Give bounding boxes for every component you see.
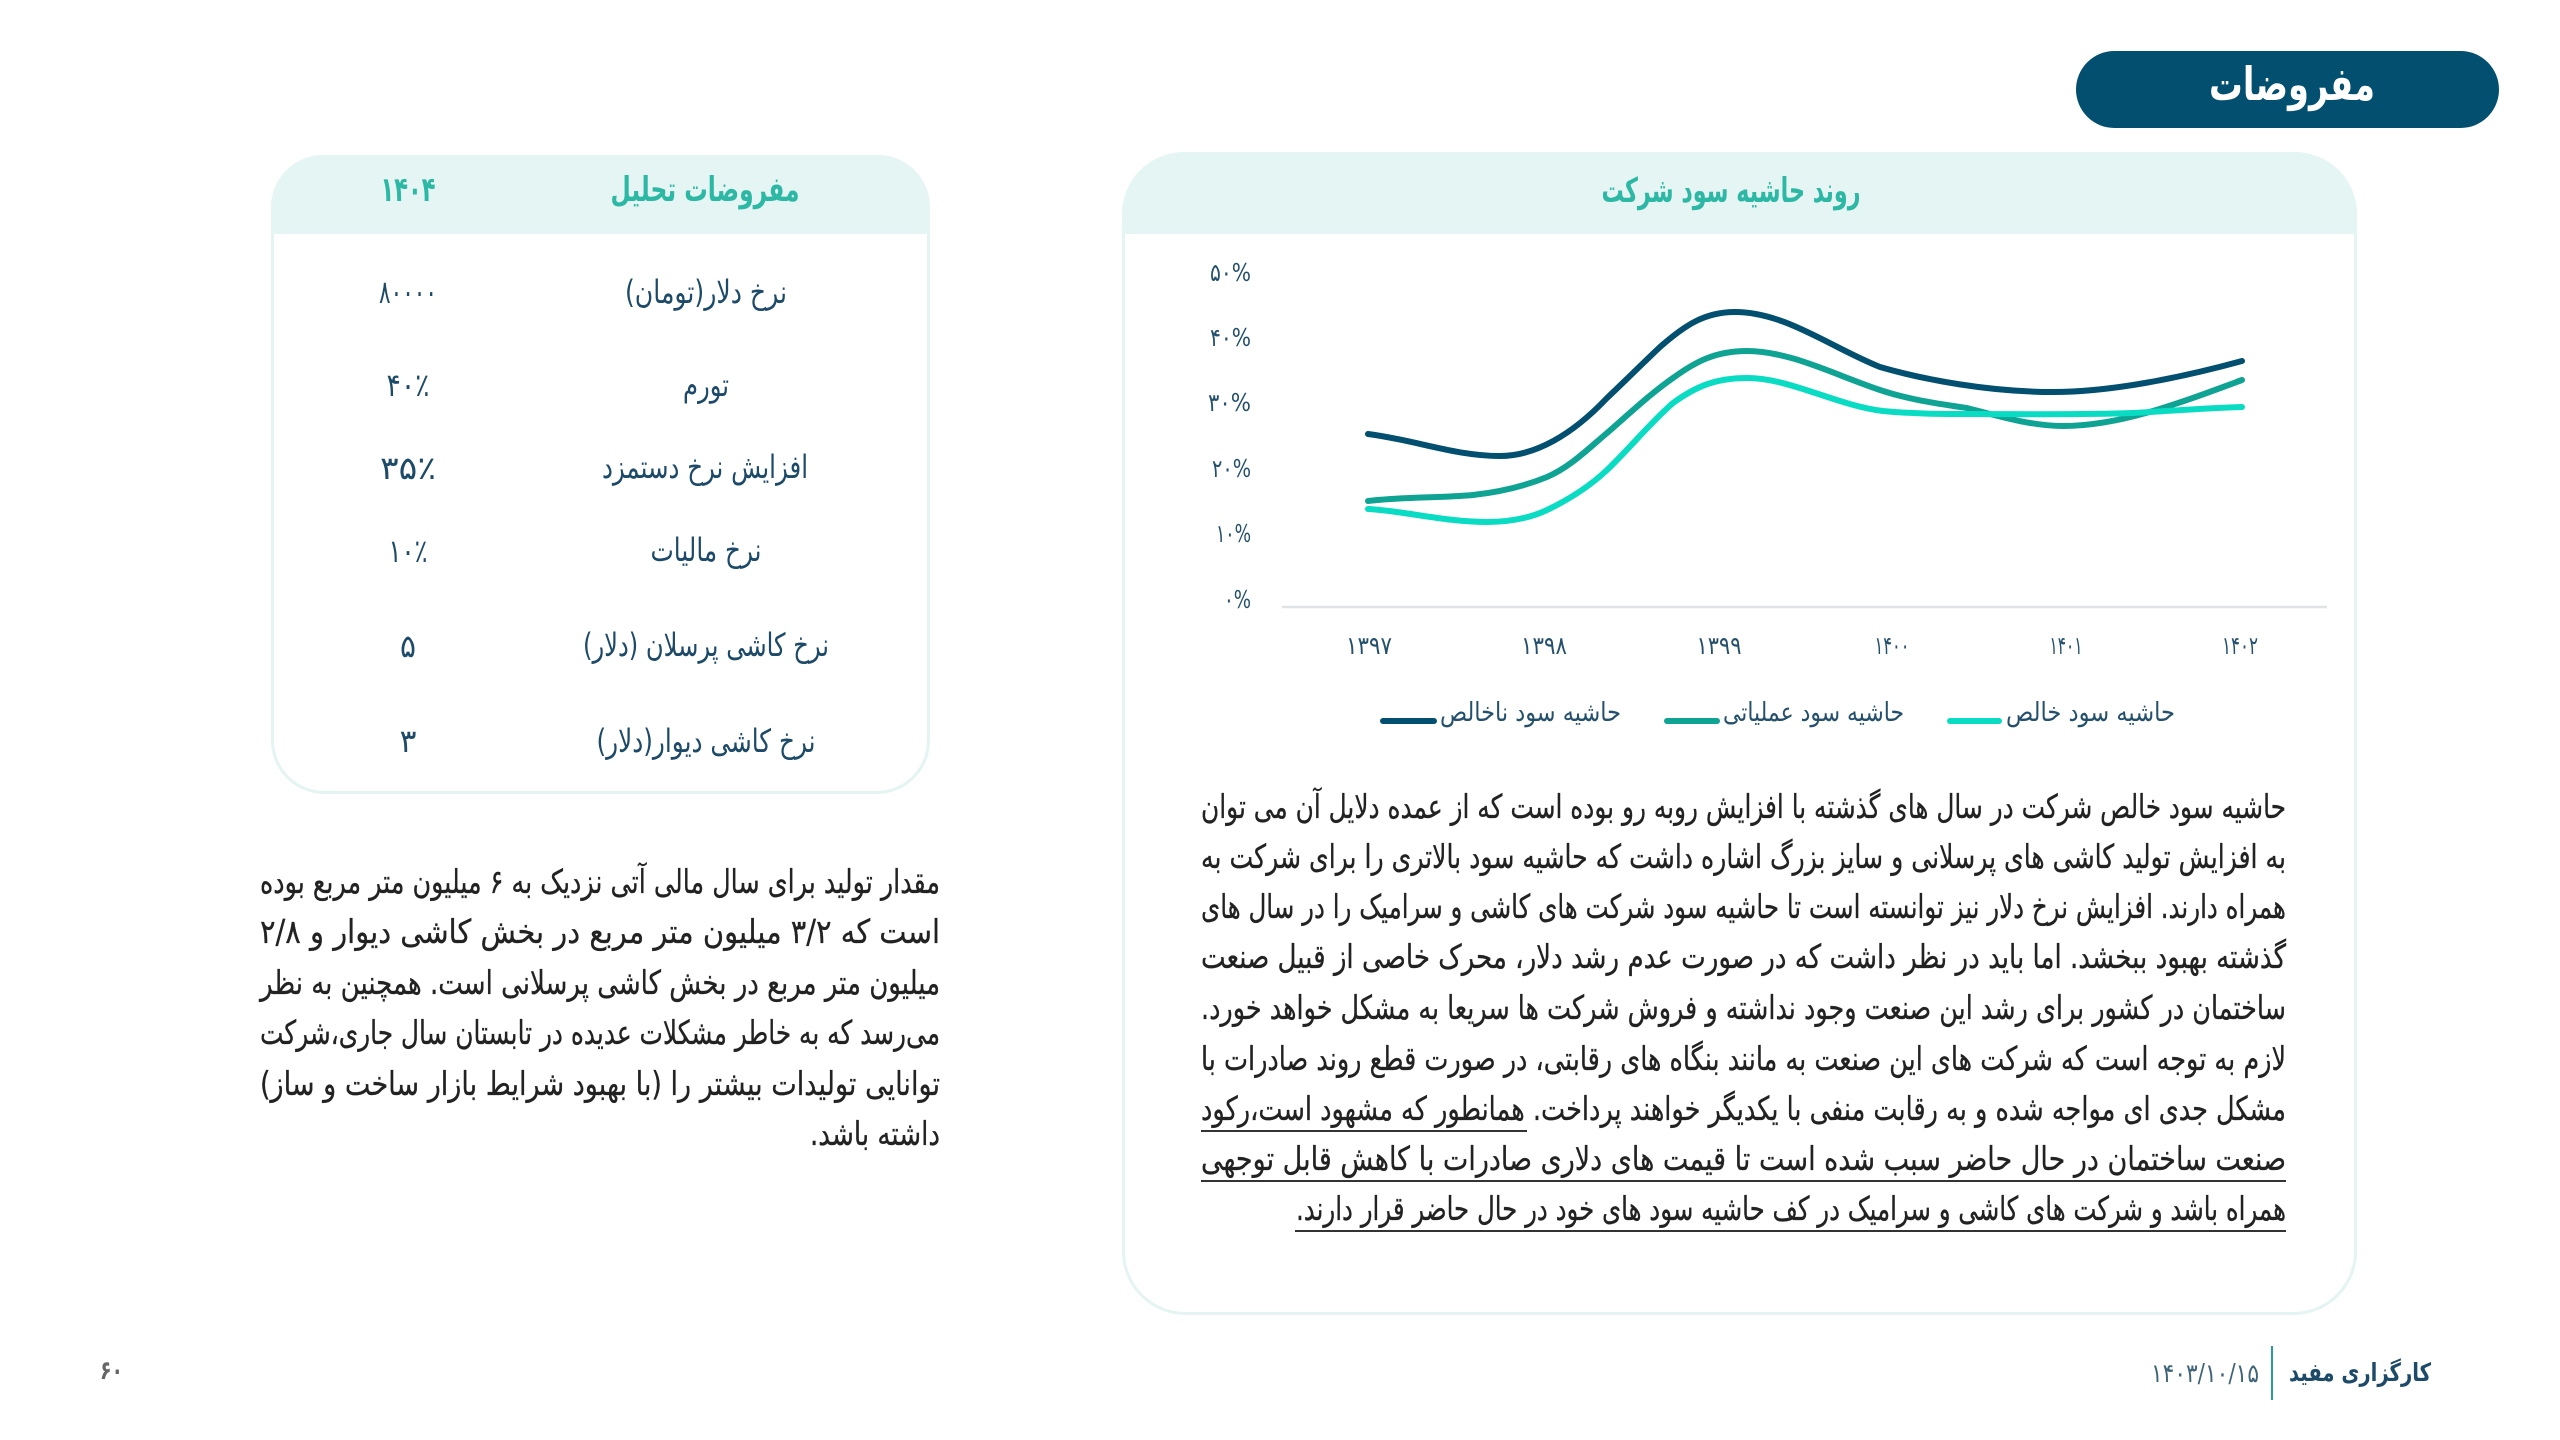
y axis labels: ۲۰% bbox=[1212, 454, 1251, 483]
paragraph: margin analysis: گذشته بهبود ببخشد. اما باید در نظر داشت که در صورت عدم رشد دلار، محرک خاصی از قبیل صنعت bbox=[1201, 937, 2286, 976]
paragraph: margin analysis: صنعت ساختمان در حال حاضر سبب شده است تا قیمت های دلاری صادرات با کاهش قابل توجهی bbox=[1201, 1139, 2286, 1178]
paragraph: production: داشته باشد. bbox=[810, 1114, 940, 1153]
paragraph: margin analysis: مشکل جدی ای مواجه شده و به رقابت منفی با یکدیگر خواهند پرداخت. همانطور که مشهود است،رکود bbox=[1201, 1089, 2286, 1128]
row: dollar rate: نرخ دلار(تومان) bbox=[625, 273, 787, 311]
y axis labels: ۳۰% bbox=[1208, 388, 1251, 417]
series: operating margin bbox=[1368, 351, 2242, 501]
row: inflation: ۴۰٪ bbox=[386, 366, 430, 404]
row: wall tile rate bbox=[400, 722, 816, 760]
table heading: year: ۱۴۰۴ bbox=[380, 170, 436, 210]
line chart bbox=[1208, 258, 2327, 728]
x axis labels: ۱۳۹۸ bbox=[1521, 631, 1567, 660]
paragraph: production: مقدار تولید برای سال مالی آتی نزدیک به ۶ میلیون متر مربع بوده bbox=[260, 862, 940, 901]
panel header band bbox=[1122, 152, 2357, 234]
table frame bbox=[272, 156, 928, 792]
date: ۱۴۰۳/۱۰/۱۵ bbox=[2151, 1359, 2259, 1389]
paragraph: production: می‌رسد که به خاطر مشکلات عدیده در تابستان سال جاری،شرکت bbox=[260, 1013, 940, 1052]
row: dollar rate: ۸۰۰۰۰ bbox=[379, 273, 437, 311]
brand name: کارگزاری مفید bbox=[2289, 1358, 2431, 1388]
title pill bbox=[2076, 51, 2499, 128]
y axis labels: ۴۰% bbox=[1210, 323, 1251, 352]
x axis labels: ۱۴۰۱ bbox=[2050, 631, 2082, 660]
x axis labels: ۱۴۰۲ bbox=[2222, 631, 2258, 660]
paragraph: margin analysis bbox=[1201, 787, 2286, 1231]
row: dollar rate bbox=[379, 273, 787, 311]
row: wage increase: افزایش نرخ دستمزد bbox=[602, 448, 808, 486]
panel frame bbox=[1124, 154, 2356, 1314]
y axis labels: ۱۰% bbox=[1216, 519, 1251, 548]
series: net margin bbox=[1368, 378, 2242, 522]
row: wage increase: ۳۵٪ bbox=[380, 449, 436, 487]
footer bbox=[100, 1346, 2431, 1400]
legend: حاشیه سود عملیاتی bbox=[1723, 698, 1904, 728]
row: porcelain tile rate bbox=[400, 626, 829, 665]
y axis labels bbox=[1208, 258, 1251, 614]
row: wall tile rate: نرخ کاشی دیوار(دلار) bbox=[596, 722, 816, 760]
y axis labels: ۰% bbox=[1224, 585, 1251, 614]
x axis labels: ۱۳۹۷ bbox=[1346, 631, 1392, 660]
y axis labels: ۵۰% bbox=[1210, 258, 1251, 287]
row: tax rate: نرخ مالیات bbox=[650, 531, 762, 569]
chart heading: روند حاشیه سود شرکت bbox=[1602, 171, 1860, 211]
x axis labels: ۱۴۰۰ bbox=[1874, 631, 1910, 660]
row: tax rate: ۱۰٪ bbox=[388, 532, 428, 570]
table header band bbox=[271, 155, 930, 234]
paragraph: production bbox=[258, 862, 940, 1153]
title pill: مفروضات bbox=[2209, 57, 2375, 111]
row: wage increase bbox=[380, 448, 808, 487]
x axis labels bbox=[1346, 631, 2258, 660]
table heading: assumptions: مفروضات تحلیل bbox=[610, 170, 800, 210]
row: wall tile rate: ۳ bbox=[400, 722, 416, 760]
legend: حاشیه سود خالص bbox=[2006, 698, 2175, 728]
legend bbox=[1380, 698, 2175, 728]
paragraph: production: است که ۳/۲ میلیون متر مربع در بخش کاشی دیوار و ۲/۸ bbox=[260, 912, 940, 951]
panel: profit margin trend bbox=[1122, 152, 2357, 1314]
row: porcelain tile rate: نرخ کاشی پرسلان (دلار) bbox=[583, 626, 829, 664]
row: tax rate bbox=[388, 531, 762, 570]
series: gross margin bbox=[1368, 312, 2242, 456]
row: porcelain tile rate: ۵ bbox=[400, 627, 416, 665]
row: inflation: تورم bbox=[683, 366, 729, 404]
page number: ۶۰ bbox=[100, 1356, 123, 1386]
legend: حاشیه سود ناخالص bbox=[1440, 698, 1621, 728]
row: inflation bbox=[386, 366, 729, 404]
x axis labels: ۱۳۹۹ bbox=[1696, 631, 1742, 660]
panel: analysis assumptions table bbox=[271, 155, 930, 792]
paragraph: production: میلیون متر مربع در بخش کاشی پرسلانی است. همچنین به نظر bbox=[258, 963, 940, 1002]
paragraph: production: توانایی تولیدات بیشتر را (با بهبود شرایط بازار ساخت و ساز) bbox=[260, 1064, 940, 1103]
